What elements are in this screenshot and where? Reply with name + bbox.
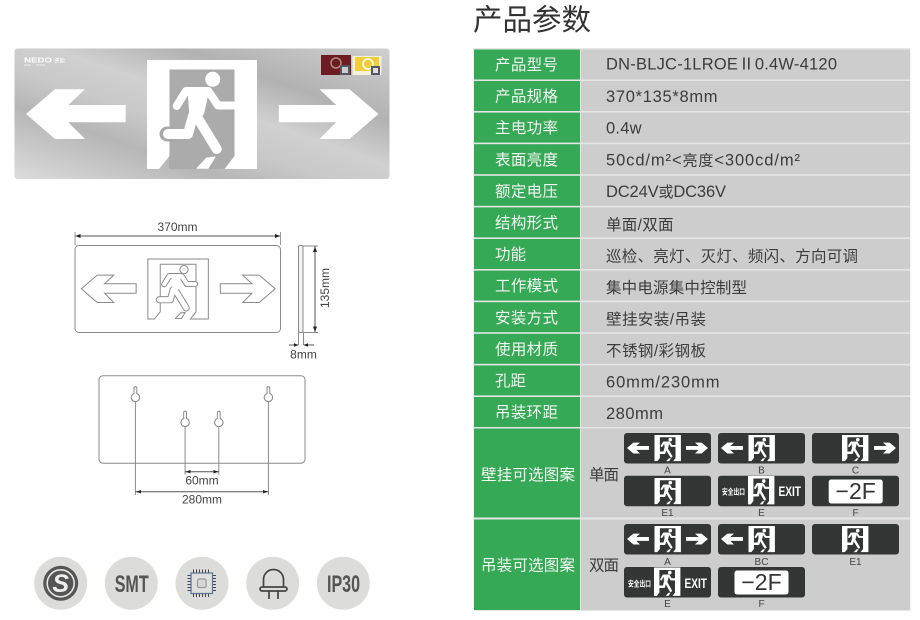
pattern E: 安全出口	[628, 578, 651, 588]
icon: IP30	[317, 557, 370, 610]
icon: S certification: S	[52, 570, 69, 598]
pattern E1: E1	[849, 557, 862, 568]
row: 功能	[474, 239, 910, 269]
row: 安装方式: 安装方式	[495, 309, 558, 327]
row: 功能: 巡检、亮灯、灭灯、频闪、方向可调	[606, 248, 858, 266]
icon: SMT: SMT	[115, 571, 149, 598]
row: 表面亮度: 50cd/m²<亮度<300cd/m²	[606, 152, 800, 170]
row: 使用材质: 使用材质	[495, 340, 558, 358]
row: 额定电压	[474, 176, 910, 206]
row: 工作模式: 集中电源集中控制型	[606, 279, 747, 297]
hole spacing: 280mm	[136, 490, 268, 506]
ceiling-mounted pattern options	[474, 520, 910, 610]
row: 安装方式: 壁挂安装/吊装	[606, 310, 706, 328]
pattern E1	[624, 476, 711, 519]
row: 使用材质: 不锈钢/彩钢板	[606, 342, 706, 360]
icon: LED	[246, 557, 299, 610]
pattern E1: E1	[661, 508, 674, 519]
back panel mounting drawing	[99, 376, 305, 506]
icon: chip	[176, 557, 228, 610]
row: 功能: 功能	[495, 246, 526, 264]
left arrow	[26, 89, 126, 139]
row: 额定电压: DC24V或DC36V	[606, 183, 726, 201]
width dimension: 370mm	[75, 220, 280, 245]
width dimension: 370mm: 370mm	[157, 220, 198, 234]
row: 产品规格	[474, 81, 910, 111]
parameter table	[474, 48, 910, 611]
row: 工作模式: 工作模式	[495, 277, 558, 295]
pattern E: E	[664, 599, 671, 610]
height dimension: 135mm: 135mm	[318, 268, 332, 308]
pattern E	[718, 476, 805, 519]
row: 吊装环距	[474, 397, 910, 427]
hole spacing: 280mm: 280mm	[182, 492, 222, 506]
pattern F: −2F	[741, 569, 782, 595]
pattern E: E	[758, 508, 765, 519]
row: 吊装环距: 280mm	[606, 405, 663, 423]
row: 额定电压: 额定电压	[495, 182, 558, 200]
row: 主电功率: 0.4w	[606, 120, 642, 138]
row: 结构形式	[474, 207, 910, 237]
pattern B	[718, 433, 805, 476]
row: 表面亮度	[474, 144, 910, 174]
pattern A: A	[664, 557, 671, 568]
pattern E	[624, 567, 711, 610]
wall-mounted pattern options	[474, 428, 910, 519]
pattern A: A	[664, 466, 671, 476]
row: 工作模式	[474, 271, 910, 301]
row: 安装方式	[474, 302, 910, 332]
pattern E: 安全出口	[722, 486, 745, 496]
row: 使用材质	[474, 334, 910, 364]
wall-mounted pattern options: 壁挂可选图案	[481, 466, 575, 484]
exit door and running figure	[147, 60, 257, 169]
row: 产品型号: 产品型号	[495, 56, 558, 74]
pattern C: C	[852, 466, 859, 476]
keyhole mounts	[131, 387, 273, 427]
ceiling-mounted pattern options: 双面	[589, 558, 619, 574]
outlined sign artwork	[81, 259, 275, 319]
pattern E: EXIT	[684, 575, 707, 591]
row: 结构形式: 结构形式	[495, 214, 558, 232]
pattern F: −2F	[836, 478, 876, 504]
pattern A	[624, 433, 711, 476]
brand logo: 德能	[54, 56, 66, 64]
wall-mounted pattern options: 单面	[589, 466, 619, 484]
pattern A	[624, 524, 711, 568]
pattern F: F	[852, 508, 859, 519]
pattern F: F	[758, 599, 765, 610]
row: 产品规格: 产品规格	[495, 88, 558, 106]
brand logo: NEDO	[24, 58, 53, 64]
title: 产品参数	[473, 4, 591, 37]
pattern BC: BC	[755, 557, 768, 568]
pattern BC	[718, 524, 805, 568]
row: 产品规格: 370*135*8mm	[606, 88, 718, 106]
pattern E1	[812, 524, 899, 568]
row: 吊装环距: 吊装环距	[495, 404, 558, 422]
row: 产品型号: DN-BLJC-1LROEⅡ0.4W-4120	[606, 56, 837, 74]
icon: SMT	[105, 557, 158, 610]
row: 产品型号	[474, 50, 910, 80]
row: 表面亮度: 表面亮度	[495, 151, 558, 169]
front dimension drawing	[75, 220, 280, 332]
ceiling-mounted pattern options: 吊装可选图案	[481, 556, 575, 574]
row: 孔距	[474, 365, 910, 395]
icon: S certification	[34, 557, 87, 610]
icon: IP30: IP30	[327, 571, 360, 598]
thickness dimension: 8mm: 8mm	[290, 348, 317, 362]
row: 结构形式: 单面/双面	[606, 216, 674, 234]
certification stickers	[321, 55, 382, 75]
row: 主电功率: 主电功率	[495, 119, 558, 137]
row: 主电功率	[474, 113, 910, 143]
pattern B: B	[758, 466, 765, 476]
pattern F	[718, 567, 805, 610]
pattern E: EXIT	[778, 483, 801, 499]
row: 孔距: 孔距	[495, 372, 526, 390]
row: 孔距: 60mm/230mm	[606, 374, 720, 392]
pattern C	[812, 433, 899, 476]
side dimension drawing	[289, 246, 332, 362]
pattern F	[812, 476, 899, 519]
right arrow	[279, 89, 378, 139]
product photo: stainless exit sign	[14, 48, 390, 179]
brand logo	[24, 56, 66, 66]
hole spacing: 60mm: 60mm	[185, 474, 219, 488]
